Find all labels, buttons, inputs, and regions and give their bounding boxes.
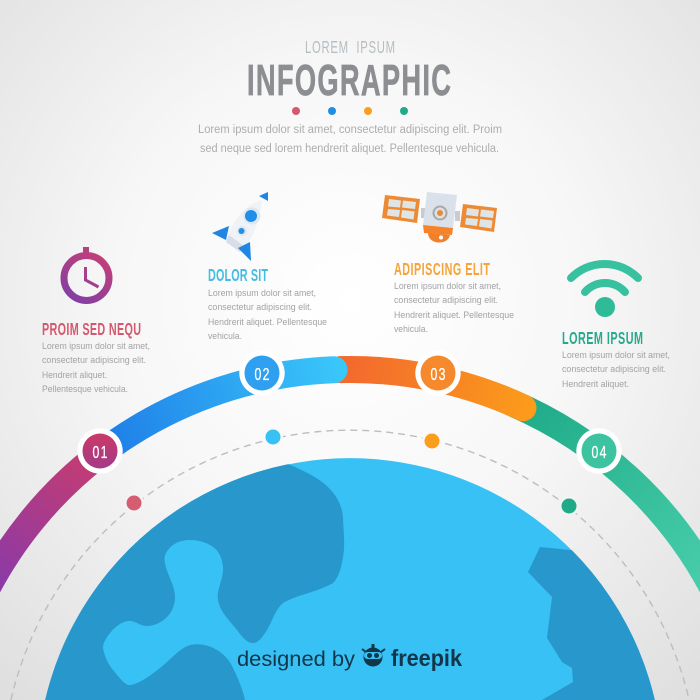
icon: rocket <box>212 192 268 261</box>
credit: designed by freepik: freepik <box>391 645 462 671</box>
badge 02: 02 <box>254 365 269 385</box>
text block: proim sed nequ: consectetur adipiscing elit. <box>42 355 146 365</box>
text block: adipiscing elit: ADIPISCING ELIT <box>394 260 490 280</box>
subtitle: LOREM IPSUM <box>305 37 395 58</box>
orbit dots <box>124 427 579 516</box>
badge 03 <box>415 350 461 396</box>
text block: lorem ipsum: Hendrerit aliquet. <box>562 379 629 389</box>
text block: proim sed nequ <box>42 320 150 394</box>
text block: adipiscing elit <box>394 260 514 334</box>
title: INFOGRAPHIC <box>247 55 451 105</box>
badge 02 <box>239 350 285 396</box>
text block: dolor sit: Lorem ipsum dolor sit amet, <box>208 288 316 298</box>
badge 01: 01 <box>92 443 107 463</box>
right continent <box>528 547 655 700</box>
text block: adipiscing elit: consectetur adipiscing elit. <box>394 295 498 305</box>
text block: adipiscing elit: Lorem ipsum dolor sit amet, <box>394 281 501 291</box>
icon: freepik mascot <box>362 644 385 666</box>
text block: dolor sit: consectetur adipiscing elit. <box>208 302 312 312</box>
text block: proim sed nequ: Lorem ipsum dolor sit amet, <box>42 341 150 351</box>
badge 01 <box>77 428 123 474</box>
text block: dolor sit: vehicula. <box>208 331 242 341</box>
timeline arc <box>0 369 700 602</box>
intro text: Lorem ipsum dolor sit amet, consectetur adipiscing elit. Proim <box>198 124 502 136</box>
dashed orbit <box>11 430 689 700</box>
credit: designed by freepik: designed by <box>237 648 356 671</box>
intro text: sed neque sed lorem hendrerit aliquet. Pellentesque vehicula. <box>200 143 499 155</box>
text block: proim sed nequ: Pellentesque vehicula. <box>42 384 128 394</box>
icon: wifi <box>571 264 638 317</box>
text block: proim sed nequ: Hendrerit aliquet. <box>42 370 107 380</box>
text block: lorem ipsum <box>562 329 670 389</box>
text block: dolor sit <box>208 266 327 341</box>
text block: adipiscing elit: vehicula. <box>394 324 428 334</box>
intro text <box>198 124 502 155</box>
text block: dolor sit: Hendrerit aliquet. Pellentesque <box>208 317 327 327</box>
text block: adipiscing elit: Hendrerit aliquet. Pellentesque <box>394 310 514 320</box>
text block: lorem ipsum: consectetur adipiscing elit. <box>562 364 666 374</box>
icon: stopwatch <box>64 247 109 300</box>
text block: dolor sit: DOLOR SIT <box>208 266 268 286</box>
left continent <box>20 460 344 700</box>
text block: proim sed nequ: PROIM SED NEQU <box>42 320 141 340</box>
header <box>198 37 502 155</box>
globe <box>20 458 680 700</box>
badge 03: 03 <box>430 365 445 385</box>
text block: lorem ipsum: LOREM IPSUM <box>562 329 643 349</box>
text block: lorem ipsum: Lorem ipsum dolor sit amet, <box>562 350 670 360</box>
icon: satellite <box>382 192 497 243</box>
colour dots <box>292 107 408 115</box>
badge 04: 04 <box>592 443 607 463</box>
credit: designed by freepik <box>237 644 462 671</box>
badge 04 <box>576 428 622 474</box>
